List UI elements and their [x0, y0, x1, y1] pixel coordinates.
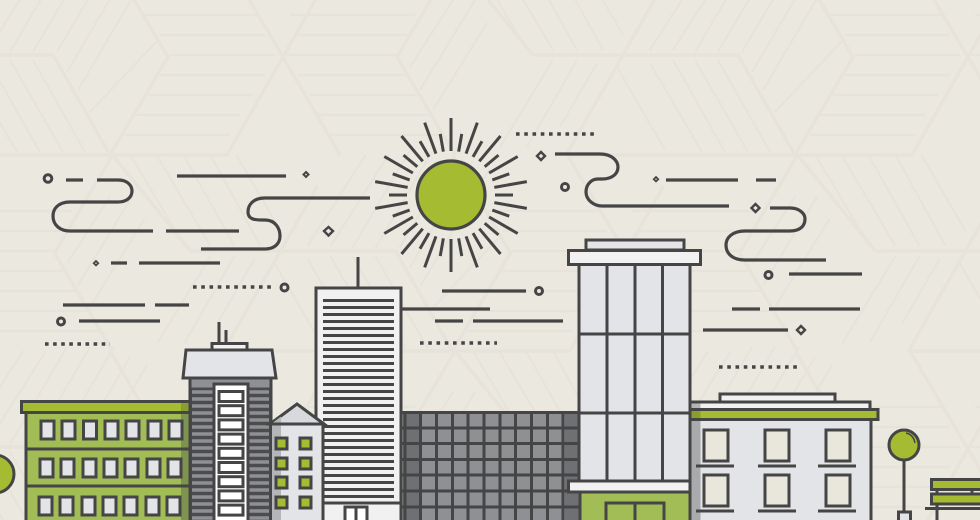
sun: [375, 118, 527, 272]
park bench: [925, 480, 980, 520]
street lamp: [889, 430, 919, 520]
glass office tower: [568, 240, 700, 520]
low-rise office building: [690, 394, 878, 520]
clouds and wind lines: right: [537, 152, 862, 367]
clouds and wind lines: left: [44, 172, 370, 344]
striped grey tower: [183, 322, 276, 520]
tree at left edge: [0, 455, 14, 493]
small gabled house: [270, 404, 324, 520]
tall white tower with horizontal louvres: [316, 257, 401, 520]
grey window grid building: [402, 412, 579, 520]
green apartment building: [22, 402, 190, 520]
clouds and wind lines: centre: [402, 134, 594, 343]
